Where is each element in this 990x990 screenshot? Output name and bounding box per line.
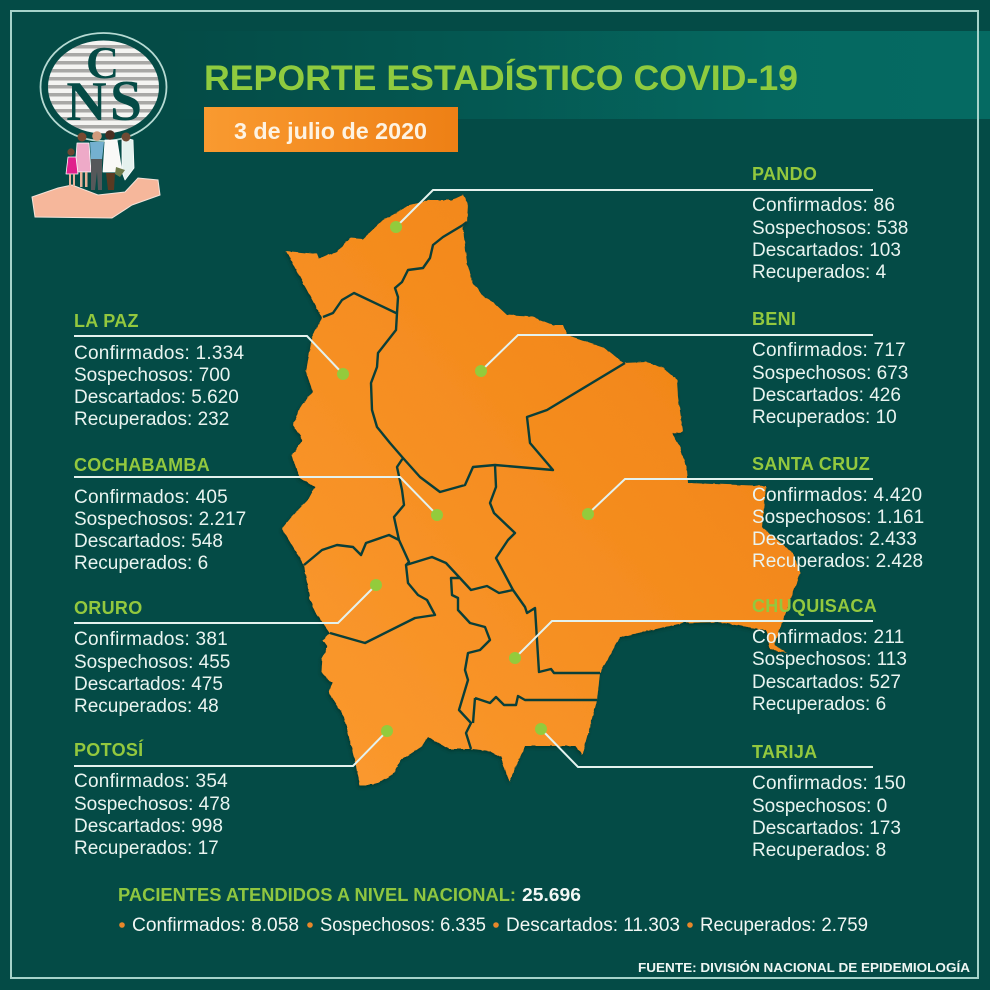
connector: Potosí <box>74 731 387 766</box>
connector: Chuquisaca <box>515 621 873 658</box>
panel: Cochabamba <box>74 455 443 574</box>
icon: family and doctor <box>66 130 134 190</box>
stats: Tarija: Descartados: 173 <box>752 818 901 839</box>
icon: open hand <box>32 178 160 218</box>
heading: Potosí: POTOSÍ <box>74 739 144 760</box>
stats: Cochabamba <box>74 487 246 574</box>
stats: Oruro <box>74 629 230 717</box>
stats: Tarija <box>752 773 906 861</box>
stats: Tarija: Confirmados: 150 <box>752 773 906 794</box>
national breakdown: Descartados: 11.303 <box>506 915 680 936</box>
marker: Oruro <box>370 579 382 591</box>
stats: Santa Cruz: Sospechosos: 1.161 <box>752 507 924 528</box>
panel: Oruro <box>74 579 382 717</box>
stats: Cochabamba: Sospechosos: 2.217 <box>74 509 246 530</box>
stats: Santa Cruz <box>752 485 924 572</box>
heading: Chuquisaca: CHUQUISACA <box>752 596 877 616</box>
map of Bolivia <box>282 195 800 785</box>
stats: Potosí: Descartados: 998 <box>74 816 223 837</box>
header band <box>170 31 990 119</box>
logo emblem <box>40 33 166 141</box>
connector: Cochabamba <box>74 477 437 515</box>
stats: Cochabamba: Recuperados: 6 <box>74 553 208 574</box>
connector: Pando <box>396 190 873 227</box>
logo emblem: N <box>66 71 107 133</box>
stats: Potosí: Confirmados: 354 <box>74 771 228 792</box>
stats: Chuquisaca: Sospechosos: 113 <box>752 649 907 670</box>
stats: Oruro: Confirmados: 381 <box>74 629 228 650</box>
panel: Santa Cruz <box>582 454 924 572</box>
logo emblem: S <box>110 68 142 133</box>
stats: Beni: Sospechosos: 673 <box>752 363 908 384</box>
marker: Cochabamba <box>431 509 443 521</box>
heading: Santa Cruz: SANTA CRUZ <box>752 454 870 474</box>
panel: La Paz <box>74 311 349 430</box>
stats: Beni: Recuperados: 10 <box>752 407 897 428</box>
stats: Pando: Sospechosos: 538 <box>752 218 908 239</box>
national breakdown <box>119 915 868 936</box>
title: REPORTE ESTADÍSTICO COVID-19 <box>204 58 798 98</box>
map outline <box>282 195 800 785</box>
stats: Pando: Recuperados: 4 <box>752 262 887 283</box>
stats: Cochabamba: Confirmados: 405 <box>74 487 228 508</box>
marker: Potosí <box>381 725 393 737</box>
panel: Potosí <box>74 725 393 859</box>
marker: La Paz <box>337 368 349 380</box>
marker: Chuquisaca <box>509 652 521 664</box>
stats: Beni <box>752 340 908 428</box>
stats: Potosí: Recuperados: 17 <box>74 838 219 859</box>
date badge: 3 de julio de 2020 <box>234 118 427 144</box>
date badge <box>204 107 458 152</box>
heading: Pando: PANDO <box>752 164 817 184</box>
connector: Beni <box>481 335 873 371</box>
heading: Tarija: TARIJA <box>752 742 817 762</box>
connector: Santa Cruz <box>588 479 873 514</box>
marker: Pando <box>390 221 402 233</box>
marker: Santa Cruz <box>582 508 594 520</box>
stats: Tarija: Recuperados: 8 <box>752 840 886 861</box>
heading: Beni: BENI <box>752 309 796 329</box>
stats: Potosí <box>74 771 230 859</box>
panel: Chuquisaca <box>509 596 907 715</box>
logo: CNS <box>32 33 166 218</box>
stats: Pando: Confirmados: 86 <box>752 195 895 216</box>
stats: La Paz: Recuperados: 232 <box>74 409 229 430</box>
panel: Tarija <box>535 723 906 861</box>
stats: La Paz: Sospechosos: 700 <box>74 365 230 386</box>
stats: Chuquisaca <box>752 627 907 715</box>
stats: Oruro: Descartados: 475 <box>74 674 223 695</box>
stats: Chuquisaca: Descartados: 527 <box>752 672 901 693</box>
stats: Santa Cruz: Descartados: 2.433 <box>752 529 917 550</box>
heading: Oruro: ORURO <box>74 598 142 618</box>
marker: Tarija <box>535 723 547 735</box>
national total: 25.696 <box>522 884 581 905</box>
stats: Tarija: Sospechosos: 0 <box>752 796 887 817</box>
connector: Oruro <box>74 585 376 623</box>
stats: Oruro: Recuperados: 48 <box>74 696 219 717</box>
stats: Pando <box>752 195 908 283</box>
stats: Chuquisaca: Recuperados: 6 <box>752 694 886 715</box>
connector: Tarija <box>541 729 873 767</box>
national breakdown: Confirmados: 8.058 <box>132 915 299 936</box>
stats: La Paz <box>74 343 244 430</box>
stats: Santa Cruz: Recuperados: 2.428 <box>752 551 923 572</box>
panel: Beni <box>475 309 908 428</box>
stats: Potosí: Sospechosos: 478 <box>74 794 230 815</box>
stats: La Paz: Confirmados: 1.334 <box>74 343 244 364</box>
connector: La Paz <box>74 336 343 374</box>
logo emblem: C <box>86 37 119 88</box>
source note: FUENTE: DIVISIÓN NACIONAL DE EPIDEMIOLOGÍA <box>638 960 970 975</box>
stats: Pando: Descartados: 103 <box>752 240 901 261</box>
stats: Chuquisaca: Confirmados: 211 <box>752 627 905 648</box>
national breakdown: Recuperados: 2.759 <box>700 915 868 936</box>
department borders <box>304 222 625 749</box>
stats: Cochabamba: Descartados: 548 <box>74 531 223 552</box>
national total: PACIENTES ATENDIDOS A NIVEL NACIONAL: <box>118 884 516 905</box>
heading: Cochabamba: COCHABAMBA <box>74 455 210 475</box>
stats: La Paz: Descartados: 5.620 <box>74 387 239 408</box>
marker: Beni <box>475 365 487 377</box>
panel: Pando <box>390 164 908 283</box>
stats: Santa Cruz: Confirmados: 4.420 <box>752 485 922 506</box>
national breakdown: Sospechosos: 6.335 <box>320 915 486 936</box>
stats: Beni: Descartados: 426 <box>752 385 901 406</box>
stats: Oruro: Sospechosos: 455 <box>74 652 230 673</box>
stats: Beni: Confirmados: 717 <box>752 340 906 361</box>
heading: La Paz: LA PAZ <box>74 311 139 331</box>
